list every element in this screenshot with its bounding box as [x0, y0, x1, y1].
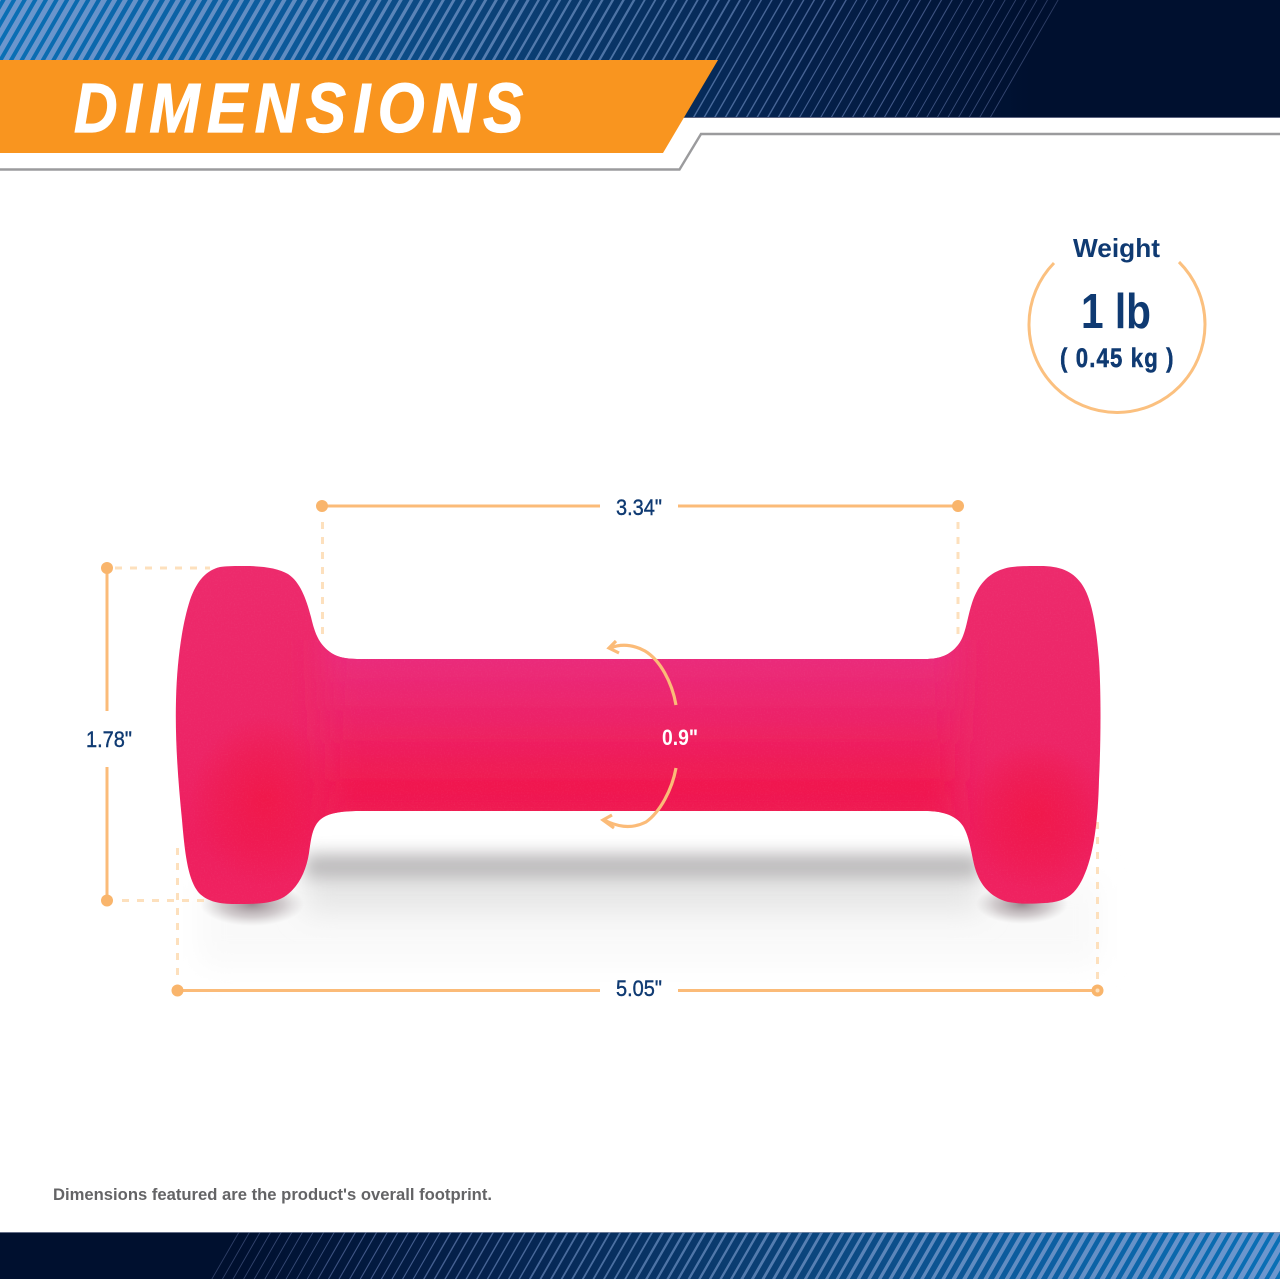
dimension: head diameter 1.78 inches [86, 562, 132, 906]
dimension: handle length 3.34 inches: 3.34" [616, 495, 662, 520]
dashed guide lines [115, 522, 1098, 982]
header striped band [0, 0, 1280, 124]
orange banner shape [0, 60, 718, 153]
weight heading: Weight [1073, 233, 1160, 263]
header outline rule [0, 134, 1280, 170]
dimension: overall length 5.05 inches [172, 976, 1104, 1001]
weight in pounds: 1 lb [1081, 285, 1151, 339]
dimension: overall length 5.05 inches: 5.05" [616, 976, 662, 1001]
dumbbell shadow [200, 854, 1100, 965]
title: DIMENSIONS [74, 69, 531, 147]
title banner [0, 60, 718, 153]
dimension: grip diameter 0.9 inches with arrows [603, 641, 698, 828]
right head shading [987, 759, 1084, 866]
weight in kilograms: ( 0.45 kg ) [1060, 344, 1175, 374]
lower curved arrow [603, 768, 676, 828]
handle shading [325, 640, 955, 830]
weight badge [1029, 233, 1205, 412]
grip value: 0.9" [662, 725, 698, 750]
dimension: handle length 3.34 inches [316, 495, 964, 520]
dumbbell [170, 560, 1110, 910]
upper curved arrow [609, 641, 676, 705]
footnote: Dimensions featured are the product's overall footprint. [53, 1186, 492, 1204]
heads base colour [170, 560, 1110, 910]
left head shading [211, 735, 323, 857]
surface grain [170, 560, 1110, 910]
dimension: head diameter 1.78 inches: 1.78" [86, 727, 132, 752]
badge ring [1029, 262, 1205, 412]
footer striped band [0, 1232, 1280, 1279]
